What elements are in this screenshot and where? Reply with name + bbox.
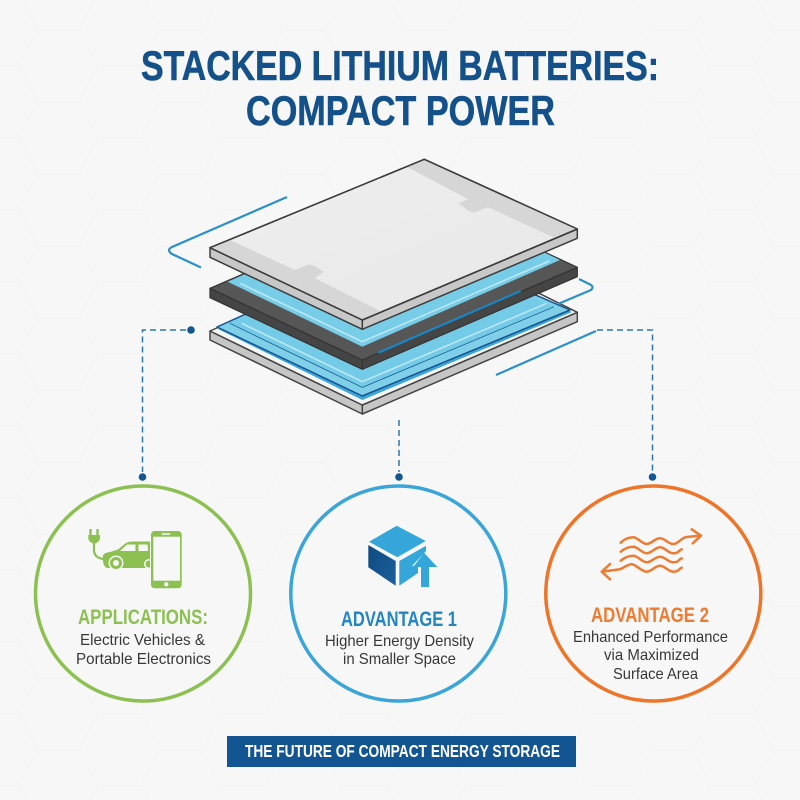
bottom plate [210, 236, 577, 414]
upper blue electrode layer [228, 195, 560, 347]
accent lines on stack right [378, 279, 596, 375]
title: COMPACT POWER [246, 87, 555, 134]
connector: advantage 2 [597, 330, 652, 472]
title: STACKED LITHIUM BATTERIES: [141, 42, 659, 89]
footer banner [227, 736, 576, 767]
description: in Smaller Space [343, 651, 456, 668]
battery stack [210, 159, 577, 414]
description [573, 629, 728, 683]
connector: applications [142, 330, 186, 472]
title [141, 42, 659, 134]
description: Electric Vehicles & [80, 632, 205, 649]
description: Enhanced Performance [573, 629, 728, 646]
description: Portable Electronics [76, 651, 211, 668]
panel: advantage 1 [291, 486, 506, 701]
dark plate [210, 196, 577, 369]
accent line: upper left bracket [169, 197, 287, 268]
icon: car and phone [88, 529, 182, 589]
icon: wavy arrows [602, 529, 701, 579]
description: via Maximized [604, 647, 699, 664]
panel: applications [36, 486, 250, 701]
heading: APPLICATIONS: [78, 606, 208, 629]
connector: advantage 1 [398, 420, 400, 472]
heading: ADVANTAGE 2 [591, 604, 709, 627]
footer banner: THE FUTURE OF COMPACT ENERGY STORAGE [245, 741, 560, 761]
terminal tabs [211, 160, 576, 319]
panel: advantage 2 [546, 486, 761, 701]
description: Higher Energy Density [325, 633, 474, 650]
description: Surface Area [613, 666, 698, 683]
lower blue electrode layer [217, 240, 572, 400]
description [76, 632, 211, 668]
heading: ADVANTAGE 1 [341, 608, 457, 631]
description [325, 633, 474, 668]
icon: cube with arrow [368, 526, 437, 587]
top plate [210, 159, 577, 329]
